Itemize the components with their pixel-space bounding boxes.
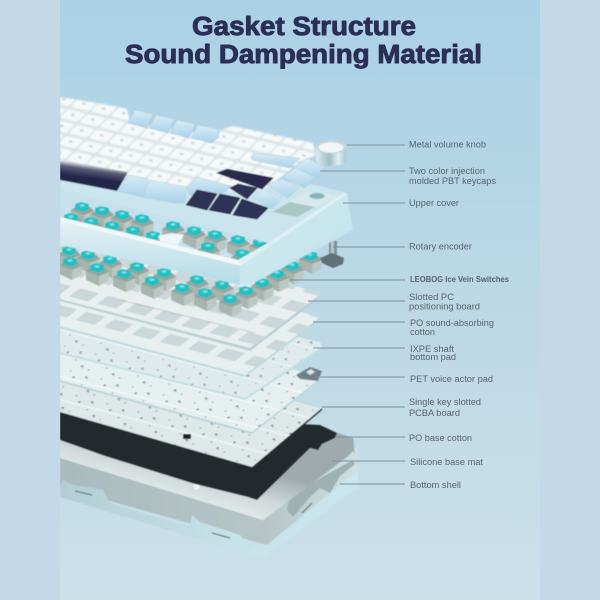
callout: PET voice actor pad: PET voice actor pad	[410, 374, 493, 384]
layer: silicone base mat	[60, 432, 354, 520]
centre panel background	[60, 0, 540, 600]
callout: Bottom shell	[340, 480, 461, 490]
left side band	[0, 0, 60, 600]
keycaps: dark navy keys	[186, 169, 273, 219]
title: Gasket Structure	[192, 13, 416, 41]
switches under the cover rim	[58, 246, 322, 317]
icon: metal volume knob	[316, 140, 346, 166]
callout: Slotted PC positioning board: positioning board	[409, 302, 480, 312]
callout: Slotted PC positioning board	[308, 292, 480, 312]
keycaps: blue modifier keys	[117, 153, 325, 209]
keycaps: white alpha block	[60, 97, 316, 192]
keycap: dark space bar	[60, 160, 128, 191]
callout: Slotted PC positioning board: Slotted PC	[409, 292, 455, 302]
callout: LEOBOG Ice Vein Switches: LEOBOG Ice Vein Switches	[410, 275, 510, 284]
layer: IXPE shaft bottom pad	[60, 336, 322, 400]
callout: Two color injection molded PBT keycaps: molded PBT keycaps	[409, 176, 496, 186]
icon: rotary encoder	[320, 241, 344, 268]
layer: bottom shell	[60, 448, 358, 545]
title: Sound Dampening Material	[125, 41, 482, 69]
callout: Upper cover: Upper cover	[409, 198, 459, 208]
upper cover opening seen through the frame	[60, 190, 254, 258]
callout: PO base cotton	[335, 433, 472, 443]
callout: Single key slotted PCBA board	[322, 397, 481, 418]
right side band	[540, 0, 600, 600]
callout: Silicone base mat: Silicone base mat	[410, 457, 484, 467]
callout: Rotary encoder: Rotary encoder	[409, 242, 472, 252]
callout: Upper cover	[343, 198, 459, 208]
callout: Metal volume knob	[347, 140, 486, 150]
layer: PO base cotton (dark)	[60, 412, 337, 500]
switches inside the cover opening	[64, 202, 268, 260]
layer: single key slotted PCBA board	[60, 382, 323, 468]
upper cover frame	[60, 165, 353, 285]
callout: IXPE shaft bottom pad	[313, 344, 456, 362]
callout: Metal volume knob: Metal volume knob	[409, 140, 486, 150]
keycaps: function row	[128, 110, 219, 143]
callout: PO sound-absorbing cotton: cotton	[410, 327, 435, 337]
callout: Rotary encoder	[333, 242, 472, 252]
layer: PET voice actor pad	[60, 369, 322, 434]
callout: Single key slotted PCBA board: Single key slotted	[409, 397, 481, 407]
callout: IXPE shaft bottom pad: bottom pad	[410, 352, 456, 362]
callout: Two color injection molded PBT keycaps: Two color injection	[409, 166, 485, 176]
callout: IXPE shaft bottom pad: IXPE shaft	[410, 344, 455, 354]
callout: Two color injection molded PBT keycaps	[320, 166, 496, 186]
exploded keyboard illustration	[58, 97, 358, 559]
layer: PO sound-absorbing cotton	[60, 302, 320, 378]
callout: PO base cotton: PO base cotton	[409, 433, 472, 443]
callout: PO sound-absorbing cotton	[313, 318, 494, 337]
callout: PO sound-absorbing cotton: PO sound-absorbing	[410, 318, 494, 328]
layer: slotted PC positioning board	[60, 244, 322, 352]
callout: Single key slotted PCBA board: PCBA board	[409, 408, 460, 418]
callout: Bottom shell: Bottom shell	[410, 480, 461, 490]
title	[125, 13, 482, 69]
